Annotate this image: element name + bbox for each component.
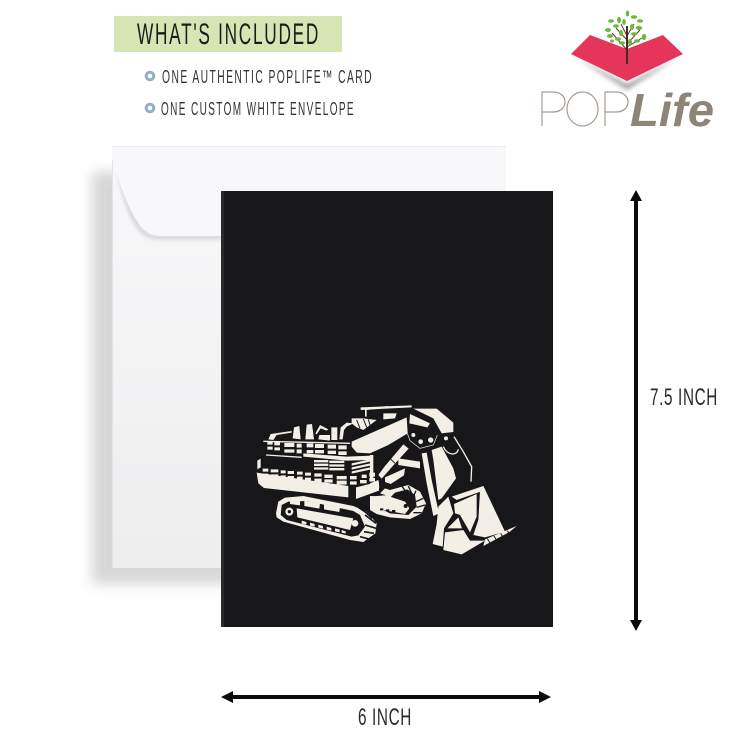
upper brick rows: [263, 441, 350, 455]
bucket arm: [422, 447, 456, 516]
boom top strip: [361, 405, 412, 419]
hydraulic cable: [443, 437, 472, 482]
rear track: [370, 485, 426, 519]
logo: tree: [605, 10, 646, 64]
logo: poplife: [542, 10, 714, 136]
heading: what's included: [114, 16, 342, 52]
front track: [276, 496, 377, 542]
card left edge highlight: [221, 191, 224, 627]
envelope flap: [112, 146, 506, 236]
item: white envelope: [146, 99, 355, 119]
excavator cutout: front half: [350, 405, 517, 554]
item: poplife card: ONE AUTHENTIC POPLIFE™ CARD: [162, 67, 373, 87]
lower brick rows: [262, 469, 375, 485]
item: white envelope: ONE CUSTOM WHITE ENVELOPE: [161, 99, 355, 119]
greeting card: [221, 191, 553, 627]
excavator cutout: rear half: [257, 406, 388, 542]
width arrow: [221, 691, 551, 703]
heading: what's included: WHAT'S INCLUDED: [137, 18, 320, 51]
included items list: [146, 67, 373, 119]
width label: 6 INCH: [358, 704, 412, 731]
envelope shadow: [92, 172, 232, 584]
logo: open red book: [571, 35, 683, 81]
hydraulic cylinders: [378, 444, 420, 484]
logo shadow: [575, 57, 679, 90]
engine louvres: [257, 453, 372, 474]
logo wordmark: pop: [542, 92, 628, 126]
bucket: [433, 486, 517, 554]
main boom: [352, 417, 408, 453]
logo wordmark: life: Life: [630, 84, 714, 136]
height arrow: [630, 190, 642, 631]
envelope flap shadow: [116, 170, 506, 240]
envelope: [112, 146, 506, 568]
boom shoulder: [409, 409, 453, 433]
roof equipment: [268, 406, 388, 441]
joint plate: [407, 433, 448, 448]
item: poplife card: [146, 67, 373, 87]
machine house base: [257, 473, 379, 499]
